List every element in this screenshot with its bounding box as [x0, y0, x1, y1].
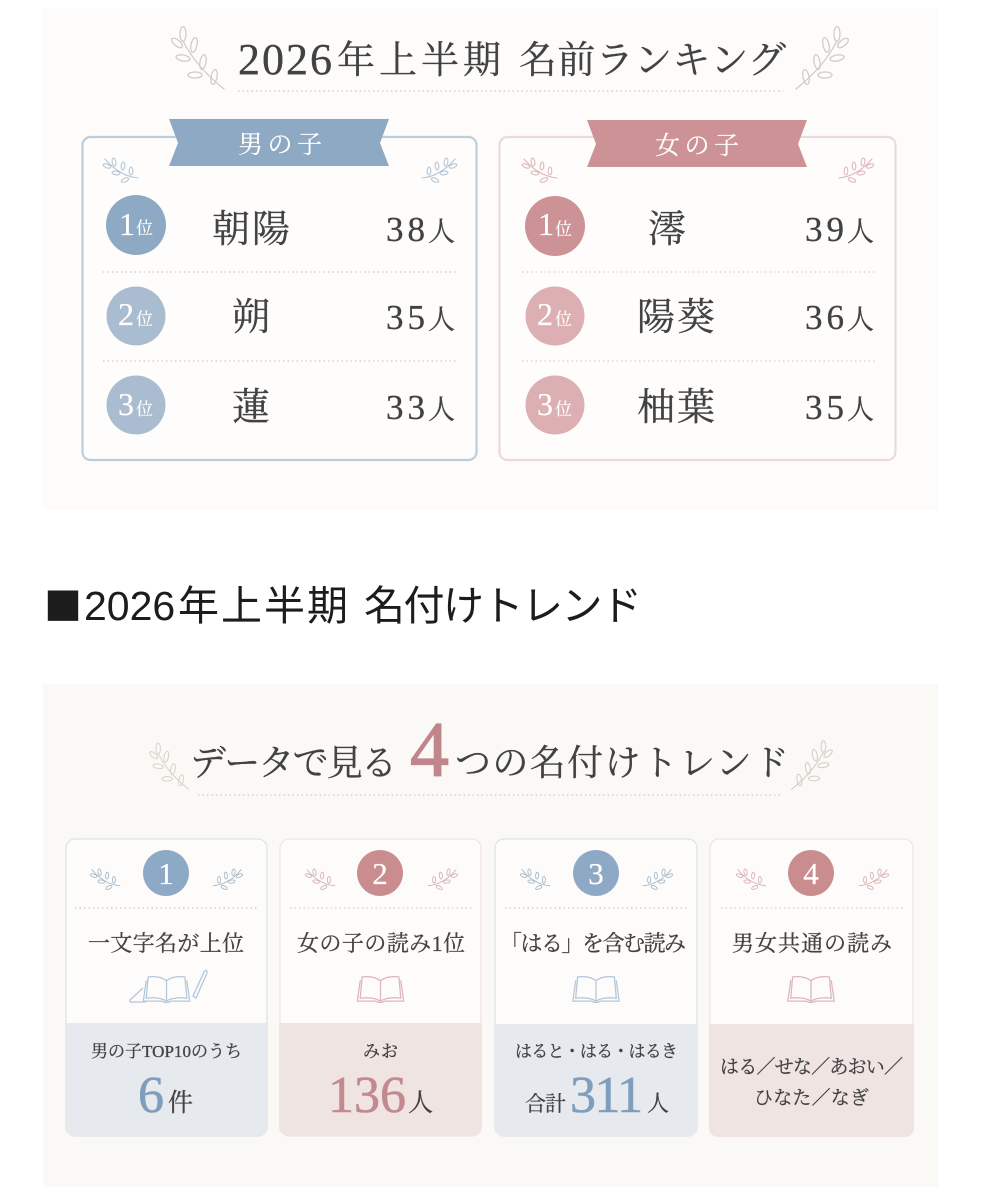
card value	[720, 1052, 903, 1110]
row: girls rank 2: 位	[555, 305, 572, 330]
panel: naming trends	[43, 684, 938, 1187]
title: name ranking	[238, 29, 786, 84]
card 3	[494, 839, 698, 1136]
card 4	[709, 839, 914, 1137]
card value: みお	[363, 1037, 398, 1062]
heading: naming trends: ■	[44, 576, 82, 631]
icon: book	[573, 977, 619, 1003]
badge 1: 1	[158, 856, 174, 891]
row: girls rank 3: 35	[805, 388, 844, 427]
panel: girls	[500, 120, 896, 460]
icon: sprig	[839, 158, 874, 183]
card value: 人	[647, 1087, 669, 1118]
panel: boys	[82, 119, 476, 460]
card value	[515, 1037, 678, 1124]
icon: book and pen	[130, 970, 207, 1003]
title: four trends	[190, 706, 789, 793]
card value: 311	[570, 1067, 643, 1124]
card value	[91, 1042, 242, 1124]
badge 3: 3	[588, 856, 604, 891]
icon: sprig	[428, 869, 458, 890]
title: four trends: データで見る	[190, 735, 397, 786]
card title: 女の子の読み1位	[297, 931, 465, 956]
heading: naming trends	[44, 572, 642, 632]
heading: naming trends: 年上半期	[178, 572, 348, 632]
row: girls rank 2: 36	[805, 298, 844, 337]
icon: sprig	[305, 869, 335, 890]
row: boys rank 1: 朝陽	[212, 198, 290, 253]
icon: sprig	[103, 158, 138, 183]
ribbon: girls	[587, 120, 807, 167]
badge 3	[573, 850, 619, 896]
row: girls rank 1: 位	[555, 215, 572, 240]
row: boys rank 1: 38	[386, 210, 425, 249]
card 1	[65, 839, 268, 1136]
row: boys rank 1	[106, 195, 455, 255]
icon: sprig	[90, 869, 120, 890]
icon: sprig	[213, 869, 243, 890]
ribbon: boys	[169, 119, 389, 166]
title: four trends: つの名付けトレンド	[455, 735, 789, 786]
row: girls rank 1: 39	[805, 210, 844, 249]
row: boys rank 2: 2	[118, 296, 134, 332]
row: girls rank 1: 人	[847, 210, 874, 249]
card value: 男の子TOP10のうち	[91, 1042, 242, 1061]
card value: はる／せな／あおい／	[720, 1052, 903, 1079]
row: boys rank 3: 位	[136, 395, 153, 420]
row: boys rank 3: 人	[428, 388, 455, 427]
row: boys rank 3	[106, 376, 455, 434]
row: boys rank 3: 3	[118, 386, 134, 422]
row: boys rank 1: 位	[136, 214, 153, 239]
row: boys rank 3: 33	[386, 388, 425, 427]
row: girls rank 3: 柚葉	[637, 376, 715, 431]
card value: 人	[408, 1083, 433, 1119]
ribbon: girls: 女の子	[655, 132, 739, 160]
icon: sprig	[522, 158, 557, 183]
row: boys rank 2: 位	[136, 305, 153, 330]
row: boys rank 2: 35	[386, 298, 425, 337]
row: girls rank 3: 位	[555, 395, 572, 420]
card title: 男女共通の読み	[732, 927, 892, 958]
heading: naming trends: 名付けトレンド	[364, 572, 642, 632]
card value: ひなた／なぎ	[754, 1083, 869, 1110]
icon: book	[357, 977, 404, 1003]
title: name ranking: 2026	[238, 35, 332, 84]
badge 2: 2	[372, 856, 388, 891]
row: boys rank 1: 人	[428, 210, 455, 249]
card 2	[279, 839, 482, 1136]
row: girls rank 2	[526, 286, 874, 346]
heading: naming trends: 2026	[84, 583, 175, 629]
title: name ranking: 年上半期	[337, 29, 501, 84]
card title: 一文字名が上位	[88, 927, 244, 958]
card value: 136	[328, 1067, 406, 1124]
row: girls rank 2: 人	[847, 298, 874, 337]
row: girls rank 2: 2	[537, 296, 553, 332]
row: girls rank 3	[526, 376, 874, 434]
icon: book	[788, 977, 834, 1003]
icon: sprig	[422, 158, 457, 183]
row: girls rank 3: 3	[537, 386, 553, 422]
row: boys rank 2: 人	[428, 298, 455, 337]
title: four trends: 4	[410, 706, 449, 793]
card value	[328, 1037, 433, 1124]
icon: left sprig	[170, 26, 224, 89]
badge 4	[788, 850, 834, 896]
badge 4: 4	[803, 856, 819, 891]
icon: sprig	[520, 869, 550, 890]
row: girls rank 3: 人	[847, 388, 874, 427]
card value: はると・はる・はるき	[515, 1037, 678, 1062]
icon: sprig	[643, 869, 673, 890]
card value: 件	[168, 1083, 193, 1119]
row: girls rank 2: 陽葵	[637, 286, 715, 341]
title: name ranking: 名前ランキング	[519, 29, 786, 84]
row: boys rank 1: 1	[119, 206, 135, 242]
icon: right sprig	[796, 26, 850, 89]
ribbon: boys: 男の子	[238, 132, 322, 159]
icon: sprig	[859, 869, 889, 890]
icon: right sprig	[792, 741, 833, 789]
icon: sprig	[736, 869, 766, 890]
card title: 「はる」を含む読み	[500, 927, 686, 958]
icon: left sprig	[149, 743, 189, 789]
row: boys rank 3: 蓮	[232, 376, 270, 431]
badge 2	[357, 850, 403, 896]
badge 1	[143, 850, 189, 896]
card value: 合計	[525, 1088, 566, 1118]
row: girls rank 1: 1	[538, 206, 554, 242]
row: girls rank 1: 澪	[648, 198, 686, 253]
panel: name ranking	[43, 8, 938, 510]
row: girls rank 1	[525, 196, 874, 256]
row: boys rank 2: 朔	[232, 286, 270, 341]
card value: 6	[138, 1067, 164, 1124]
row: boys rank 2	[106, 286, 455, 346]
